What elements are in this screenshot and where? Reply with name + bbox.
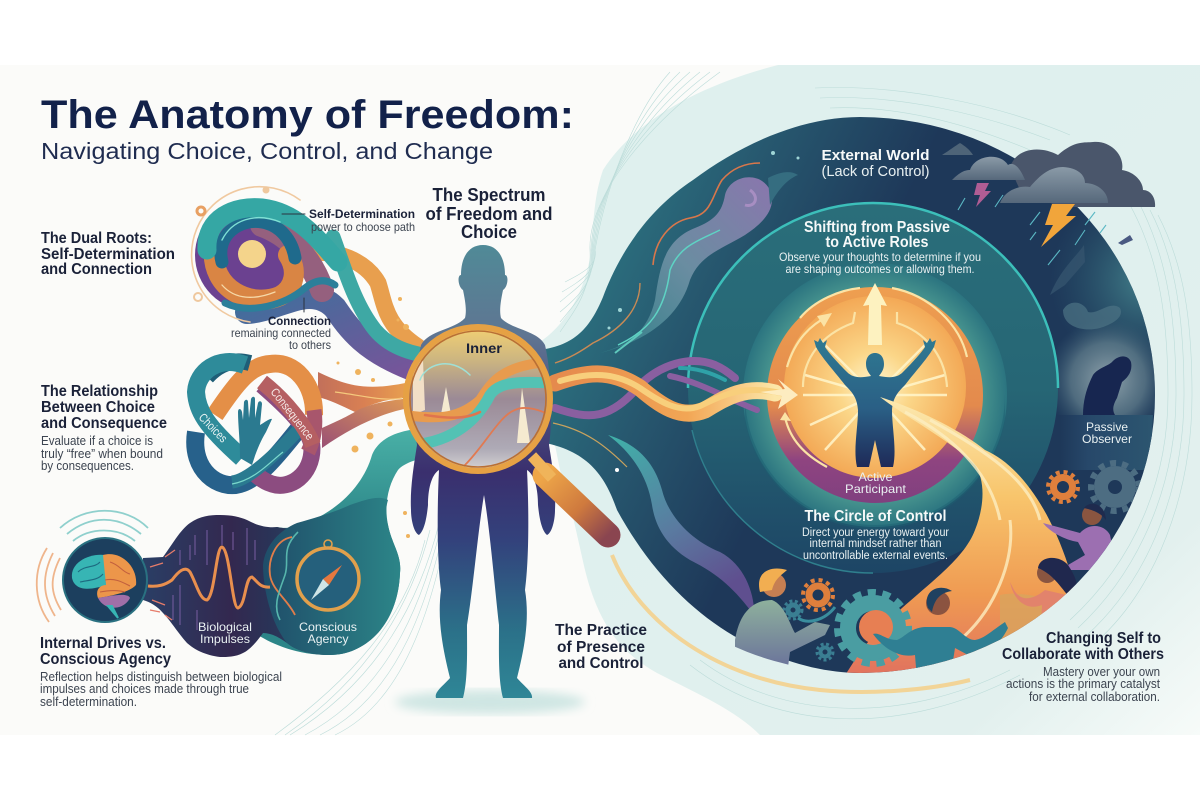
ribbon to lens: purple <box>247 297 410 368</box>
active participant label <box>845 470 907 496</box>
passive observer label <box>1082 420 1132 446</box>
conscious agency label: Agency <box>308 632 348 646</box>
icon: lightning <box>1041 204 1076 247</box>
heading: internal drives: self-determination. <box>40 695 137 709</box>
conscious agency label <box>299 620 357 646</box>
inner label: Inner <box>466 340 503 356</box>
purple person <box>1043 523 1111 570</box>
dark teal top loop <box>207 361 250 377</box>
heading: spectrum: The Spectrum <box>432 185 546 205</box>
active participant label: Active <box>858 470 893 484</box>
heading: spectrum <box>426 185 552 242</box>
heading: choice and consequence: Evaluate if a choice is <box>41 434 153 448</box>
heading: choice and consequence: Between Choice <box>41 399 155 416</box>
swirl disc <box>195 199 307 311</box>
heading: collaborate: Changing Self to <box>1046 630 1161 647</box>
heading: choice and consequence: and Consequence <box>41 415 167 432</box>
passive observer label: Observer <box>1082 432 1132 446</box>
icon: brain medallion <box>63 538 147 622</box>
callout: connection: Connection <box>268 314 331 328</box>
central human figure <box>411 245 555 698</box>
panel: internal drives blob <box>37 498 400 657</box>
heading: collaborate: Collaborate with Others <box>1002 646 1164 663</box>
heading: dual roots: and Connection <box>41 261 152 278</box>
mint backdrop <box>535 65 1200 735</box>
panel: circle of control rings <box>688 203 1058 573</box>
icon: figure arms raised <box>814 338 936 467</box>
heading: collaborate: Mastery over your own <box>1043 665 1160 679</box>
callout: connection: to others <box>289 338 331 352</box>
teal wave lower-left <box>608 435 754 615</box>
purple right loop <box>250 385 312 485</box>
knot labels: Consequence <box>268 385 317 443</box>
panel: active participant sun <box>767 283 983 503</box>
DNA <box>270 537 295 615</box>
biological impulses label <box>198 620 252 646</box>
panel: collaborating people <box>735 463 1139 690</box>
dark lower band <box>195 425 302 485</box>
passive observer backdrop <box>1074 415 1153 470</box>
heading: spectrum: Choice <box>461 222 517 242</box>
icon: compass <box>297 548 359 610</box>
panel: swirl and streams <box>192 186 440 655</box>
heading: internal drives: impulses and choices made through true <box>40 682 249 696</box>
conscious agency label: Conscious <box>299 620 357 634</box>
icon: open hand <box>238 397 272 465</box>
external world label: (Lack of Control) <box>822 164 930 180</box>
arrow: energy ribbons from lens to sun <box>555 361 798 415</box>
ribbon to lens: teal <box>333 237 418 354</box>
callout: connection <box>231 314 331 352</box>
teal Choices band <box>196 362 245 458</box>
smoke swirl upper-left <box>555 151 800 363</box>
circle of control text: The Circle of Control <box>804 508 946 525</box>
callout: self-determination <box>309 207 415 234</box>
heading: dual roots: Self-Determination <box>41 246 175 263</box>
icon: storm clouds <box>942 142 1155 295</box>
orange top band <box>215 364 314 415</box>
knot labels <box>196 385 317 445</box>
knot labels: Choices <box>196 410 230 445</box>
thin orbit <box>192 187 300 322</box>
leader lines <box>282 213 305 215</box>
pink woman <box>1010 582 1066 614</box>
heading: internal drives: Internal Drives vs. <box>40 635 166 652</box>
stream to lens <box>318 372 410 412</box>
shifting roles text <box>779 219 981 276</box>
circle of control text: internal mindset rather than <box>810 538 942 550</box>
heading: dual roots <box>41 230 175 278</box>
icon: gears <box>784 463 1139 663</box>
ground shadow <box>395 690 585 714</box>
circle of control text: uncontrollable external events. <box>803 550 948 562</box>
heading: practice of presence: and Control <box>558 655 644 672</box>
heading: practice of presence <box>555 622 647 672</box>
heading: collaborate <box>1002 630 1164 704</box>
icon: choice and consequence knot <box>195 361 410 485</box>
passive observer label: Passive <box>1086 420 1128 434</box>
heading: choice and consequence: truly “free” when bound <box>41 447 163 461</box>
active participant label: Participant <box>845 482 907 496</box>
teal up band <box>232 426 302 482</box>
heading: choice and consequence <box>41 383 167 473</box>
heading: practice of presence: of Presence <box>557 639 645 656</box>
title: The Anatomy of Freedom: <box>41 93 574 137</box>
circle of control text: Direct your energy toward your <box>802 527 949 539</box>
thin wave lines <box>275 72 1192 735</box>
external world label <box>822 147 930 180</box>
title <box>41 93 574 164</box>
heading: choice and consequence: The Relationship <box>41 383 158 400</box>
ribbon to lens: orange <box>313 252 418 347</box>
panel: external world circle <box>540 117 1160 673</box>
impulse bars <box>173 525 255 630</box>
heading: collaborate: actions is the primary catalyst <box>1006 677 1160 691</box>
consequence band <box>262 382 313 445</box>
icon: passive observer silhouette <box>1063 303 1131 415</box>
icon: magnifying glass <box>405 327 608 535</box>
callout: connection: remaining connected <box>231 326 331 340</box>
heading: spectrum: of Freedom and <box>426 204 552 224</box>
gold sweep below circle <box>612 555 970 692</box>
heading: practice of presence: The Practice <box>555 622 647 639</box>
ring arrows <box>785 288 967 467</box>
heading: dual roots: The Dual Roots: <box>41 230 152 247</box>
callout: self-determination: power to choose path <box>311 220 415 234</box>
callout: self-determination: Self-Determination <box>309 207 415 221</box>
shifting roles text: to Active Roles <box>826 234 928 251</box>
biological impulses label: Impulses <box>200 632 250 646</box>
arrow: golden flow to collaboration <box>842 397 1075 680</box>
shifting roles text: Observe your thoughts to determine if you <box>779 250 981 264</box>
shifting roles text: Shifting from Passive <box>804 219 950 236</box>
title: Navigating Choice, Control, and Change <box>41 138 493 164</box>
impulse wave <box>148 547 270 608</box>
heading: internal drives: Reflection helps distinguish between biological <box>40 670 282 684</box>
teal stream from lower blob <box>250 428 440 655</box>
heading: internal drives: Conscious Agency <box>40 651 171 668</box>
left person <box>735 600 830 665</box>
signal arcs <box>60 511 148 541</box>
heading: internal drives <box>40 635 282 709</box>
center person <box>873 622 1008 668</box>
biological impulses label: Biological <box>198 620 252 634</box>
heading: choice and consequence: by consequences. <box>41 459 134 473</box>
shifting roles text: are shaping outcomes or allowing them. <box>786 262 974 276</box>
arrow up <box>863 283 887 345</box>
heading: collaborate: for external collaboration. <box>1029 690 1160 704</box>
external world label: External World <box>822 147 930 164</box>
circle of control text <box>802 508 949 562</box>
